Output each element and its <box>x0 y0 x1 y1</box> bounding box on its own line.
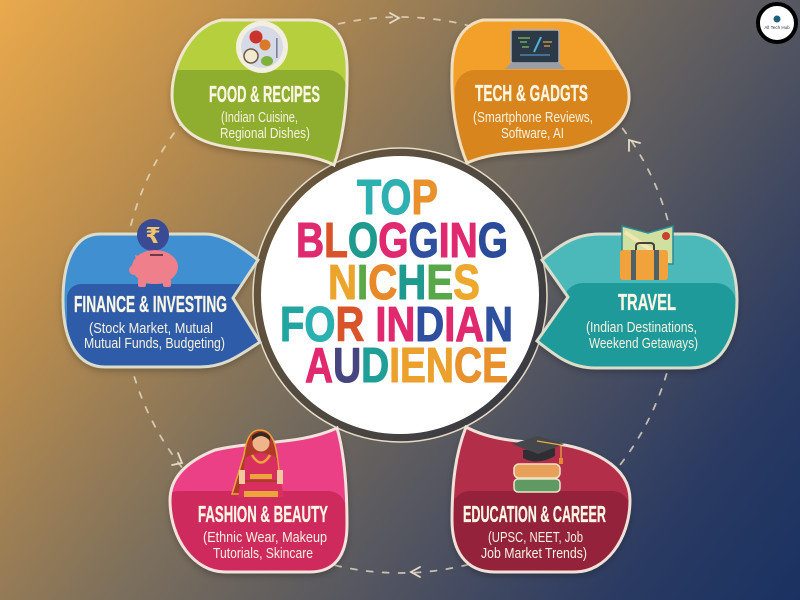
text: education details: (UPSC, NEET, Job <box>488 529 583 546</box>
heading: tech and gadgets: TECH & GADGTS <box>475 80 588 106</box>
text: food details <box>220 109 310 142</box>
icon: food plate <box>236 21 288 73</box>
panel: fashion and beauty <box>160 428 347 581</box>
heading: food and recipes: FOOD & RECIPES <box>209 81 320 107</box>
icon: piggy bank <box>129 250 178 287</box>
heading: finance and investing: FINANCE & INVESTING <box>74 291 227 317</box>
text: travel details: (Indian Destinations, <box>586 319 697 336</box>
dashed cycle ring with arrows <box>122 13 678 577</box>
icon: rupee coin <box>137 219 169 251</box>
panel: tech and gadgets <box>448 18 631 168</box>
text: fashion details: Tutorials, Skincare <box>213 545 313 562</box>
text: fashion details: (Ethnic Wear, Makeup <box>203 529 327 546</box>
icon: map and suitcase <box>620 226 673 280</box>
icon: books and graduation cap <box>512 436 564 492</box>
icon: rupee coin: ₹ <box>145 224 161 249</box>
text: food details: (Indian Cuisine, <box>221 109 298 126</box>
text: food details: Regional Dishes) <box>220 125 310 142</box>
logo badge: All Tech Hub <box>764 25 790 30</box>
icon: laptop <box>505 30 565 69</box>
heading: fashion and beauty: FASHION & BEAUTY <box>198 501 328 527</box>
text: tech details: (Smartphone Reviews, <box>473 109 593 126</box>
title line: NICHES: NICHES <box>328 256 480 310</box>
title line: AUDIENCE: AUDIENCE <box>305 339 508 393</box>
text: finance details: (Stock Market, Mutual <box>89 320 213 337</box>
text: fashion details <box>203 529 327 562</box>
title line: TOP: TOP <box>357 171 438 225</box>
heading: travel: TRAVEL <box>618 289 676 315</box>
text: finance details <box>84 320 225 352</box>
icon: woman in traditional dress <box>232 430 284 497</box>
heading: education and career: EDUCATION & CAREER <box>463 501 606 527</box>
text: tech details: Software, AI <box>501 125 564 142</box>
panel: education and career <box>452 427 630 581</box>
title line: BLOGGING: BLOGGING <box>296 214 508 268</box>
text: education details <box>481 529 587 562</box>
panel: finance and investing <box>63 219 270 379</box>
text: tech details <box>473 109 593 142</box>
title line: FOR INDIAN: FOR INDIAN <box>280 298 513 352</box>
text: travel details: Weekend Getaways) <box>589 335 698 352</box>
text: education details: Job Market Trends) <box>481 545 587 562</box>
panel: travel <box>530 226 737 383</box>
logo badge <box>758 4 796 42</box>
text: travel details <box>586 319 698 352</box>
center circle with title <box>253 148 547 442</box>
panel: food and recipes <box>160 20 347 180</box>
text: finance details: Mutual Funds, Budgeting) <box>84 335 225 352</box>
